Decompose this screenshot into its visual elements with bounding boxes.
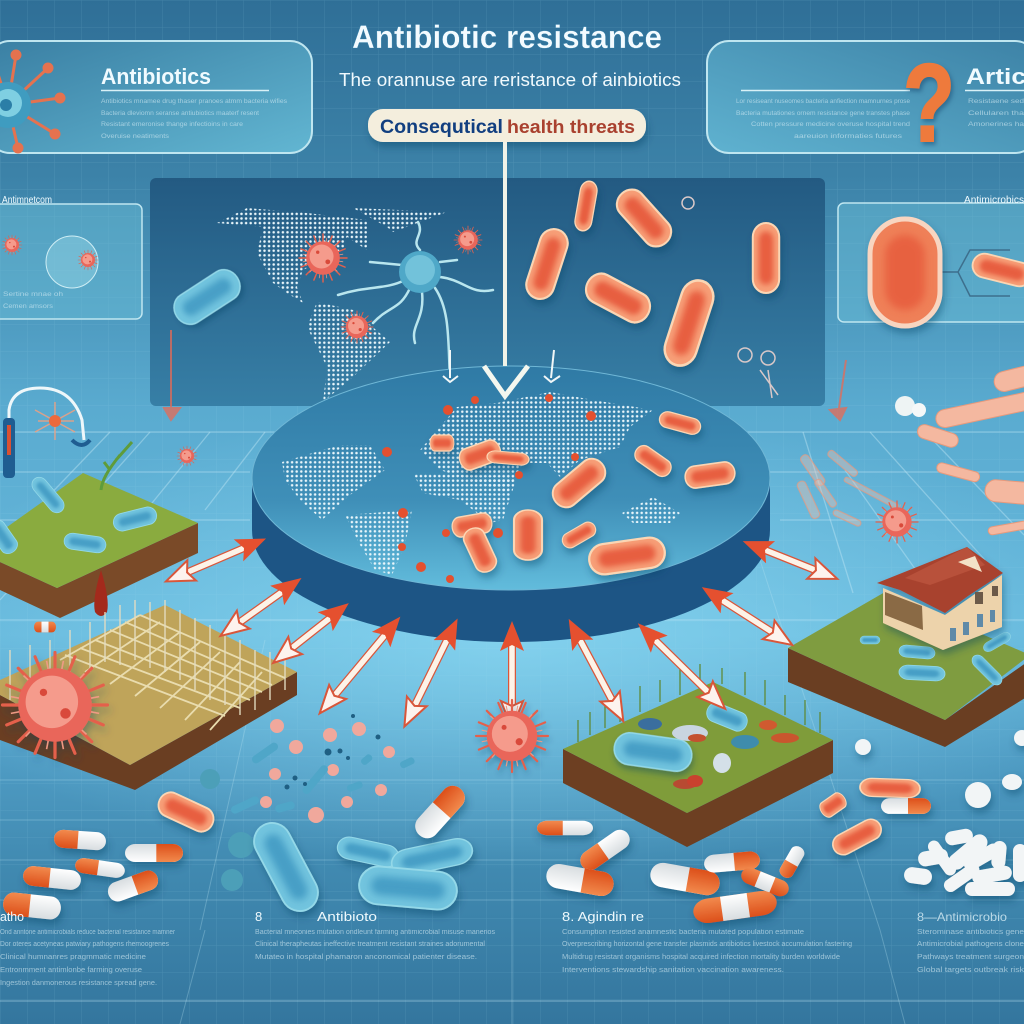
right scattered bacteria bbox=[796, 362, 1024, 543]
text column 1: Ingestion danmonerous resistance spread gene. bbox=[0, 980, 157, 987]
panel: world map dark screen bbox=[150, 178, 825, 406]
body text bbox=[736, 98, 1024, 140]
panel: right detail: Antimicrobics bbox=[964, 195, 1024, 206]
callout pill: health threats: health threats bbox=[507, 117, 635, 137]
panel: right detail bbox=[838, 195, 1024, 326]
heading: Artic bbox=[966, 64, 1024, 89]
white tablets pile bbox=[855, 730, 1024, 896]
panel: left detail: Antimnetcom bbox=[2, 195, 52, 206]
icon: question mark: ? bbox=[903, 42, 955, 165]
disc bacteria bbox=[430, 410, 736, 576]
heading: Antibiotics bbox=[101, 64, 211, 89]
text column 4: 8—Antimicrobio bbox=[917, 910, 1007, 924]
pink and blue particles bbox=[200, 714, 416, 891]
body text: Resistaene sed bbox=[968, 98, 1024, 105]
left device icon bbox=[3, 388, 197, 478]
text column 1 bbox=[0, 909, 176, 987]
colourful machines bbox=[638, 718, 799, 789]
text column 2: 8 bbox=[255, 909, 262, 924]
house bbox=[877, 547, 1003, 650]
orange fuzzy bacteria bbox=[154, 778, 920, 858]
text column 3: 8. Agindin re bbox=[562, 909, 644, 924]
body text: Overuise neatiments bbox=[101, 133, 170, 140]
text column 3: Interventions stewardship sanitation vaccination awareness. bbox=[562, 967, 784, 974]
spiky virus bbox=[3, 652, 108, 758]
capsule pills bbox=[2, 781, 931, 925]
text column 1: Dor oteres acetyneas patwiary pathogens rhemoogrenes bbox=[0, 941, 169, 948]
land block: left bbox=[0, 442, 198, 618]
text column 4: Global targets outbreak risk bbox=[917, 967, 1024, 974]
blood drop bbox=[94, 570, 108, 616]
body text: Cotten pressure medicine overuse hospital trend bbox=[751, 121, 910, 128]
text column 1: Ond anntone antimicrobials reduce bacterial resistance mamner bbox=[0, 929, 176, 936]
text column 2 bbox=[255, 909, 495, 961]
land block: right with house bbox=[788, 547, 1024, 747]
subtitle: The orannuse are reristance of ainbiotics bbox=[339, 70, 681, 90]
panel: left detail bbox=[0, 195, 142, 319]
centre red virus bbox=[476, 700, 548, 772]
text column 2: Clinical therapheutas ineffective treatment resistant straines adorumental bbox=[255, 941, 485, 948]
central arrow from callout bbox=[443, 142, 560, 396]
text column 4: Pathways treatment surgeon bbox=[917, 954, 1024, 961]
body text bbox=[101, 98, 288, 140]
small jelly marks bbox=[682, 197, 778, 398]
body text: Lor resiseant nuseomes bacteria anfiection mamnurnes prose bbox=[736, 98, 910, 105]
body text: Cellularen tha bbox=[968, 110, 1024, 117]
faint red pointers bbox=[164, 330, 846, 420]
land block: centre right bbox=[563, 664, 833, 847]
title: Antibiotic resistance bbox=[352, 19, 662, 55]
text column 1: Clinical humnanres pragmmatic medicine bbox=[0, 954, 146, 961]
callout pill: health threats bbox=[368, 109, 646, 142]
text column 3: Consumption resisted anamnestic bacteria mutated population estimate bbox=[562, 929, 804, 936]
icon: bacteria cell with spokes bbox=[0, 51, 64, 152]
text column 3 bbox=[562, 909, 852, 974]
dotted world map bbox=[217, 208, 447, 402]
callout pill: health threats: Consequtical bbox=[380, 117, 503, 138]
land block: field with stakes bbox=[0, 600, 297, 790]
panel: left detail: Cemen amsors bbox=[3, 303, 54, 310]
text column 2: Bacterial mneonies mutation ondleunt farming antimicrobial misuse manerios bbox=[255, 929, 495, 936]
text column 4: Sterominase antibiotics gene bbox=[917, 929, 1024, 936]
large bacterium bbox=[870, 219, 940, 326]
text column 1: atho bbox=[0, 909, 24, 924]
body text: aareuion informaties futures bbox=[794, 133, 903, 140]
panel: left detail: Sertine mnae oh bbox=[3, 291, 63, 298]
bacteria orange group bbox=[523, 180, 779, 370]
text column 2: Antibioto bbox=[317, 909, 377, 924]
body text: Bacteria mutationes ornem resistance gene transtes phase bbox=[736, 110, 910, 117]
text column 2: Mutateo in hospital phamaron anconomical patienter disease. bbox=[255, 954, 477, 961]
text column 3: Overprescribing horizontal gene transfer plasmids antibiotics livestock accumulation fastering bbox=[562, 941, 852, 948]
blue bacteria, lower centre bbox=[247, 816, 475, 918]
panel: articles bbox=[707, 41, 1024, 165]
text column 4: Antimicrobial pathogens clone bbox=[917, 941, 1024, 948]
text column 1: Entronmment antimlonbe farming overuse bbox=[0, 967, 142, 974]
virus cluster bbox=[299, 226, 482, 343]
body text: Bacteria dleviomn seranse antiubiotics maaterf resent bbox=[101, 110, 259, 117]
body text: Amonerines ha bbox=[968, 121, 1024, 128]
blue bacterium bbox=[168, 264, 246, 330]
text column 4 bbox=[917, 910, 1024, 974]
central disc with world map bbox=[252, 366, 770, 642]
icon: neuron-like cell bbox=[338, 222, 493, 380]
red markers bbox=[382, 394, 596, 583]
panel: antibiotics bbox=[0, 41, 312, 153]
body text: Resistant emeronise thange infectioins in care bbox=[101, 121, 243, 128]
plant bbox=[101, 442, 132, 490]
dotted continents bbox=[282, 392, 680, 575]
body text: Antibiotics mnamee drug thaser pranoes atmm bacteria wifies bbox=[101, 98, 288, 105]
double-headed arrows bbox=[188, 548, 815, 705]
small capsule near left block bbox=[34, 622, 56, 632]
text column 3: Multidrug resistant organisms hospital acquired infection mortality burden worldwide bbox=[562, 954, 840, 961]
